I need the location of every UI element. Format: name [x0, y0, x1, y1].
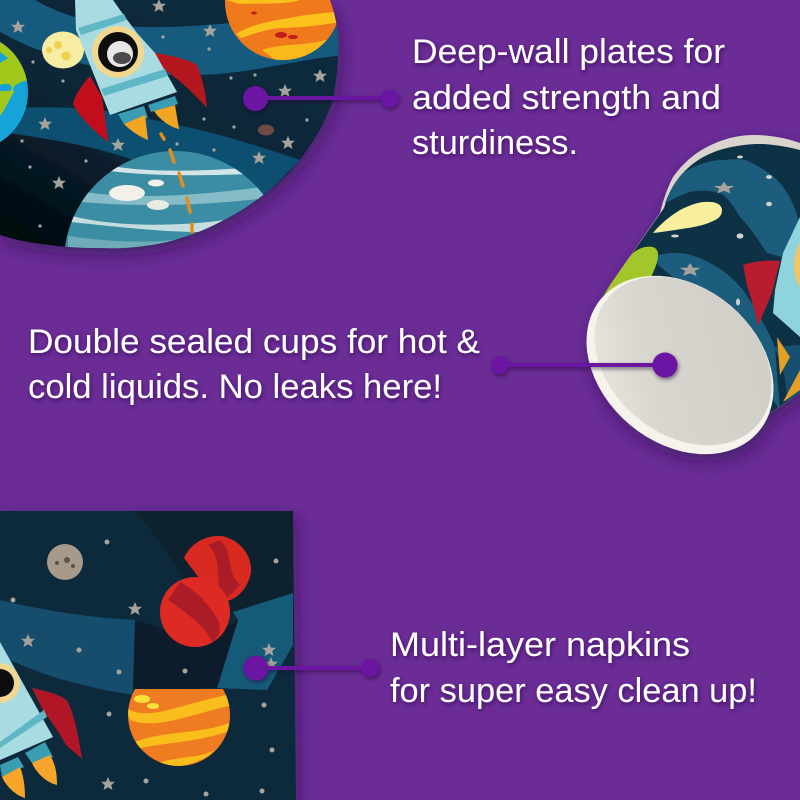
callout: cups pointer — [491, 352, 678, 378]
cup moon — [653, 202, 722, 233]
text: napkins feature: for super easy clean up! — [390, 672, 757, 710]
moon — [42, 32, 84, 68]
text: napkins feature: Multi-layer napkins — [390, 626, 690, 664]
panel: space plate — [0, 0, 345, 250]
text: cups feature: Double sealed cups for hot & — [28, 323, 480, 361]
cup rocket fin — [743, 261, 780, 326]
callout: plates pointer — [243, 86, 398, 111]
cup earth — [603, 247, 658, 300]
callout: napkins pointer — [244, 656, 379, 680]
cup rocket — [773, 217, 800, 402]
napkin stars and dots — [10, 540, 278, 796]
panel: space cup — [582, 134, 800, 469]
rocket exhaust dashes — [161, 134, 192, 232]
text: plates feature: added strength and — [412, 79, 721, 117]
cup stars and dots — [671, 156, 772, 306]
planet: orange — [224, 0, 342, 62]
stars and dots — [11, 0, 327, 228]
text: napkins feature — [390, 626, 757, 710]
text: plates feature: sturdiness. — [412, 124, 578, 162]
text: plates feature — [412, 33, 725, 162]
napkin asteroid — [47, 544, 83, 580]
napkin red planets — [160, 536, 251, 647]
text: cups feature — [28, 323, 480, 406]
planet: earth — [0, 42, 28, 142]
napkin rocket — [0, 642, 82, 798]
cup base — [551, 239, 800, 491]
text: plates feature: Deep-wall plates for — [412, 33, 725, 71]
panel: space napkin — [0, 511, 300, 800]
napkin orange planet — [128, 689, 230, 766]
text: cups feature: cold liquids. No leaks here! — [28, 368, 442, 406]
rocket — [73, 0, 207, 142]
planet: teal striped — [60, 150, 290, 250]
